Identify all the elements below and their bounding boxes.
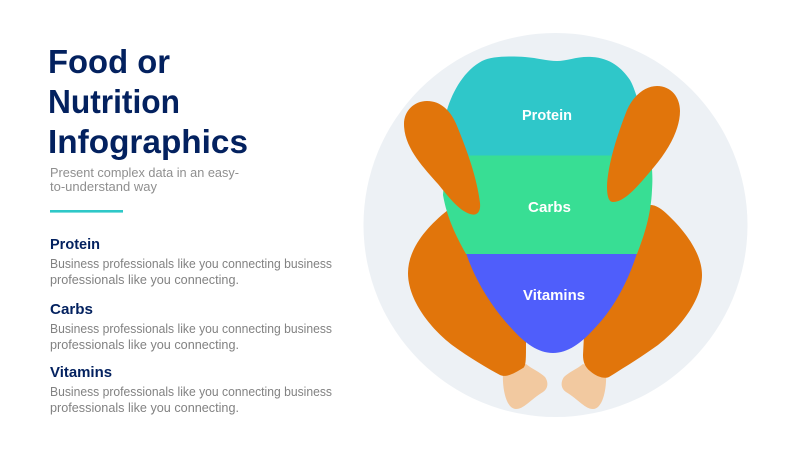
text block: protein: Business professionals like you connecting business xyxy=(50,257,332,271)
icon: left foot xyxy=(503,364,547,409)
text block: vitamins: Vitamins xyxy=(50,364,112,381)
text block: carbs: professionals like you connecting. xyxy=(50,338,239,352)
food diagram: chicken xyxy=(404,56,702,409)
text block: protein: professionals like you connecting. xyxy=(50,273,239,287)
label: protein: Protein xyxy=(522,107,572,124)
subtitle xyxy=(50,166,239,194)
title: Nutrition xyxy=(48,83,180,120)
chart segment: protein xyxy=(446,56,650,155)
subtitle: Present complex data in an easy- xyxy=(50,166,239,180)
text block: carbs: Carbs xyxy=(50,301,93,318)
title: Food or xyxy=(48,43,170,80)
subtitle: to-understand way xyxy=(50,180,158,194)
text block: carbs: Business professionals like you connecting business xyxy=(50,322,332,336)
accent line xyxy=(50,210,123,213)
icon: left wing xyxy=(404,101,480,215)
text block: carbs xyxy=(50,301,332,352)
background circle xyxy=(364,33,748,417)
text block: vitamins: Business professionals like you connecting business xyxy=(50,385,332,399)
icon: left leg xyxy=(408,210,526,376)
label: carbs: Carbs xyxy=(528,199,571,216)
chart segment: carbs xyxy=(443,154,652,254)
text block: protein: Protein xyxy=(50,236,100,253)
icon: right leg xyxy=(583,205,702,378)
icon: right wing xyxy=(607,86,680,202)
title: Infographics xyxy=(48,123,248,160)
icon: right foot xyxy=(562,364,606,409)
label: vitamins: Vitamins xyxy=(523,287,585,304)
text block: protein xyxy=(50,236,332,287)
text block: vitamins xyxy=(50,364,332,415)
chart segment: vitamins xyxy=(466,253,637,353)
title xyxy=(48,43,248,160)
text block: vitamins: professionals like you connecting. xyxy=(50,401,239,415)
